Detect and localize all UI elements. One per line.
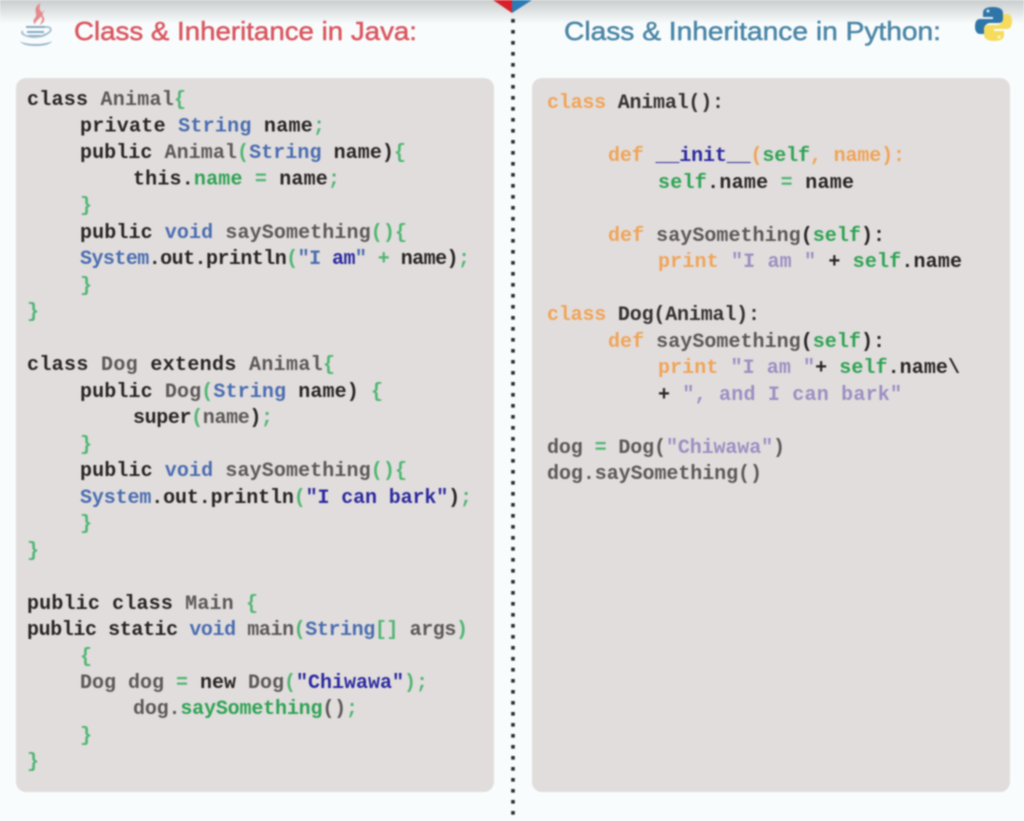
code block: class Animal: def saySomething(self):	[608, 225, 885, 248]
code block: class Main: Dog dog = new Dog("Chiwawa");	[80, 672, 428, 695]
code block: class Dog: class Dog extends Animal{	[27, 354, 335, 377]
code block: class Dog: class Dog(Animal):	[547, 304, 760, 327]
code block: class Dog	[547, 304, 960, 407]
code block: class Animal	[547, 92, 962, 274]
panel: Java code	[16, 78, 494, 792]
icon: red and blue diamond marker	[493, 0, 532, 13]
icon: Java coffee cup	[20, 3, 52, 46]
code block: class Main: public static void main(String[] args)	[27, 619, 468, 642]
code block: class Main: }	[80, 725, 92, 748]
code block: usage: dog.saySomething()	[547, 463, 762, 486]
code block: class Animal: public Animal(String name){	[80, 142, 406, 165]
code block: class Dog: def saySomething(self):	[608, 331, 885, 354]
code block: class Animal: self.name = name	[658, 172, 854, 195]
code block: class Animal	[27, 89, 470, 324]
code block: class Animal: this.name = name;	[133, 168, 340, 191]
code block: class Animal: }	[27, 301, 39, 324]
code block: usage	[547, 437, 785, 486]
code block: class Animal: }	[80, 275, 92, 298]
code block: class Dog	[27, 354, 472, 563]
code block: class Dog: }	[80, 434, 92, 457]
code block: class Dog: }	[27, 540, 39, 563]
code block: class Main: {	[80, 646, 92, 669]
code block: class Dog: public Dog(String name) {	[80, 381, 383, 404]
code block: class Main	[27, 593, 468, 774]
code block: class Animal: def __init__(self, name):	[608, 145, 905, 168]
code block: class Dog: + ", and I can bark"	[658, 384, 902, 407]
code block: class Main: public class Main {	[27, 593, 258, 616]
code block: class Animal: class Animal():	[547, 92, 724, 115]
code block: class Animal: private String name;	[80, 115, 325, 138]
panel: Python code	[532, 78, 1010, 792]
code block: class Animal: }	[80, 195, 92, 218]
code block: class Animal: System.out.println("I am" + name);	[80, 248, 470, 271]
code block: class Dog: public void saySomething(){	[80, 460, 407, 483]
code block: class Animal: public void saySomething(){	[80, 222, 407, 245]
code block: class Animal: class Animal{	[27, 89, 186, 112]
code block: class Dog: super(name);	[133, 407, 273, 430]
code block: class Animal: print "I am " + self.name	[658, 251, 962, 274]
code block: class Dog: }	[80, 513, 92, 536]
code block: class Main: }	[27, 751, 39, 774]
heading: Python: Class & Inheritance in Python:	[564, 16, 941, 46]
code block: class Dog: System.out.println("I can bark");	[80, 487, 472, 510]
code block: class Main: dog.saySomething();	[133, 698, 358, 721]
code block: class Dog: print "I am "+ self.name\	[658, 357, 960, 380]
heading: Java: Class & Inheritance in Java:	[74, 16, 417, 46]
icon: Python logo	[975, 7, 1012, 41]
code block: usage: dog = Dog("Chiwawa")	[547, 437, 785, 460]
